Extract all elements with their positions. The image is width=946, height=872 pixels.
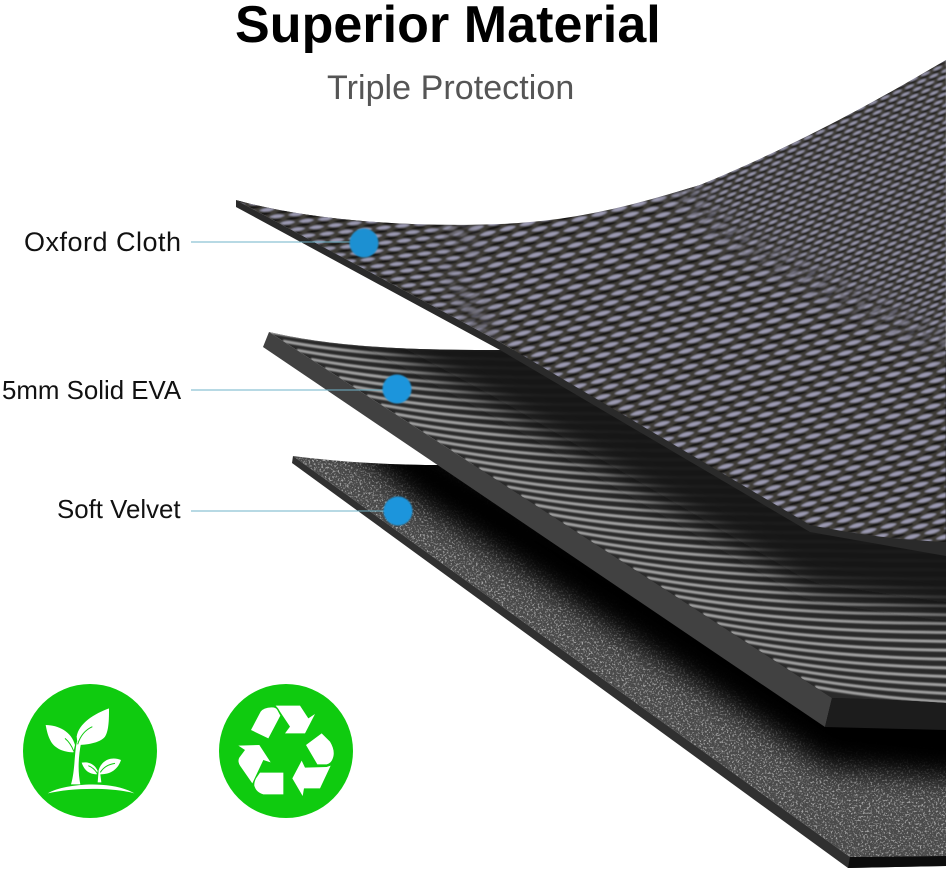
subtitle: Triple Protection [327, 69, 574, 107]
icon: recycle badge [219, 684, 353, 818]
callout: 5mm Solid EVA: 5mm Solid EVA [2, 377, 182, 405]
material layers illustration [230, 20, 946, 870]
layer: soft velvet [292, 456, 946, 868]
icon: plant badge [23, 684, 157, 818]
layer: oxford cloth [230, 20, 946, 556]
callout: Soft Velvet [57, 496, 412, 526]
callout: Soft Velvet: Soft Velvet [57, 496, 181, 524]
callout: Oxford Cloth [24, 227, 378, 258]
callout: 5mm Solid EVA [2, 374, 412, 405]
callout: Oxford Cloth: Oxford Cloth [24, 227, 182, 257]
layer: solid EVA [263, 332, 946, 730]
